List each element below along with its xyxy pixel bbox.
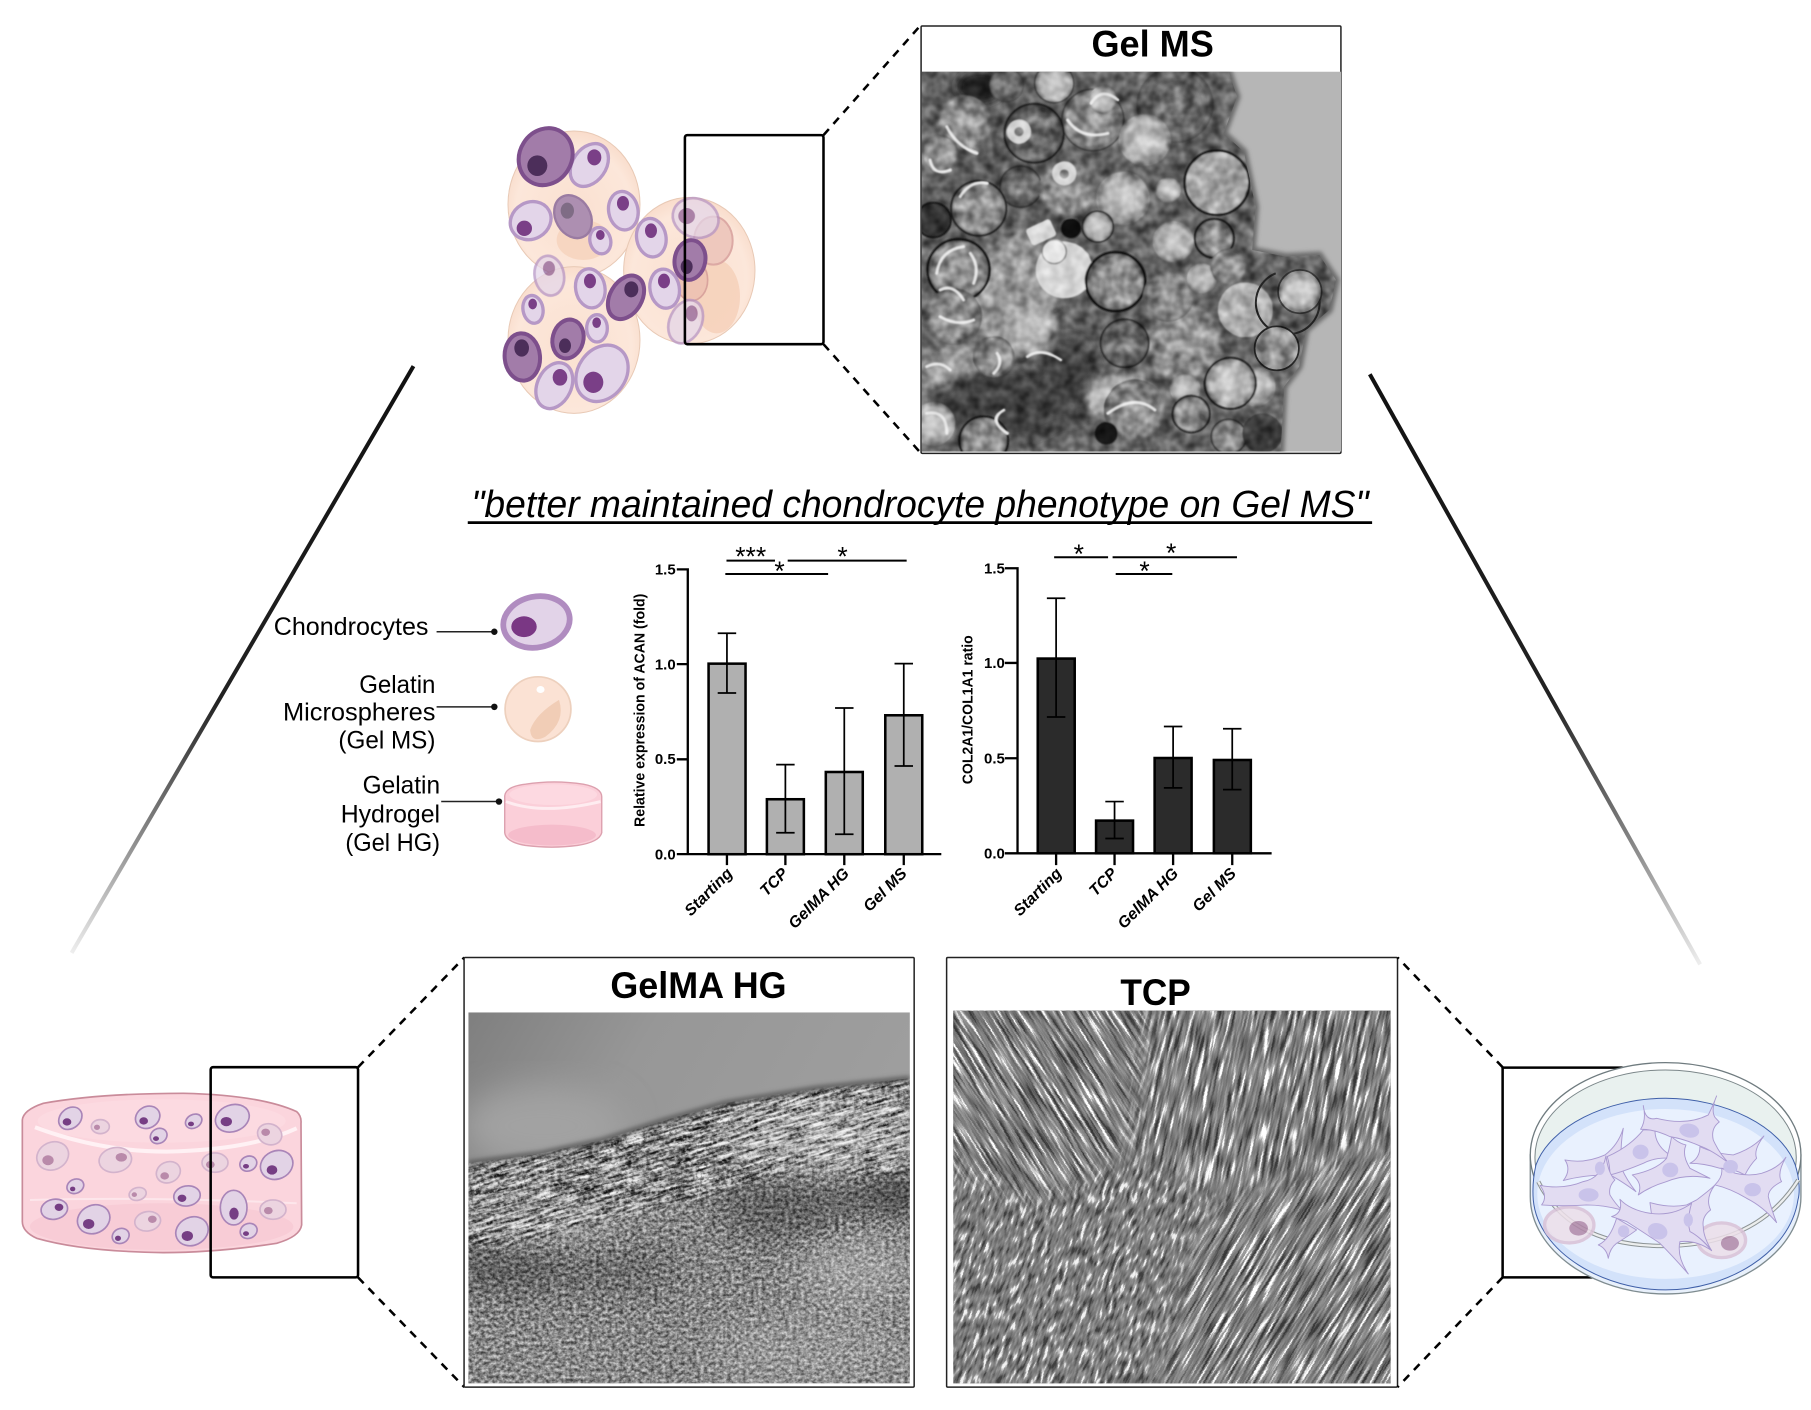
icon: chondrocytes on gelatin microspheres	[503, 118, 755, 415]
legend item: gelatin microspheres	[283, 671, 571, 754]
axes	[1005, 568, 1272, 865]
error bars	[1047, 598, 1241, 839]
x axis labels: Gel MS	[860, 865, 911, 915]
panel frame	[921, 26, 1341, 453]
dish lid	[1530, 1063, 1801, 1247]
legend item: chondrocytes	[274, 590, 575, 654]
legend item: gelatin hydrogel	[341, 771, 602, 857]
significance stars: *	[1166, 538, 1176, 568]
y axis tick labels	[655, 562, 676, 863]
icon: gelatin hydrogel disc with cells	[22, 1093, 302, 1253]
legend item: gelatin microspheres: Gelatin	[359, 671, 435, 699]
y axis tick labels: 0.0	[655, 846, 676, 863]
faded cells	[32, 1120, 286, 1233]
panel: GelMA HG micrograph	[463, 956, 915, 1388]
x axis labels	[682, 865, 911, 932]
y axis tick labels: 1.0	[984, 655, 1005, 672]
grey cell	[547, 188, 599, 245]
y axis tick labels: 1.5	[655, 562, 676, 579]
dark cells	[503, 118, 709, 382]
y axis title: Relative expression of ACAN (fold)	[632, 593, 648, 827]
error bars	[718, 633, 913, 834]
arrow: right diagonal connector	[1370, 374, 1700, 964]
rounded chondrocytes	[1545, 1207, 1746, 1258]
microsphere 2	[624, 197, 755, 344]
micrograph image	[468, 1012, 910, 1384]
axes	[677, 569, 941, 865]
icon: zoom rectangle on microspheres	[685, 135, 823, 344]
legend item: gelatin microspheres: Microspheres	[283, 699, 435, 727]
y axis tick labels: 0.0	[984, 846, 1005, 863]
significance stars: *	[1074, 539, 1084, 569]
x axis labels: GelMA HG	[786, 865, 853, 932]
icon: zoom rectangle on hydrogel	[211, 1067, 358, 1277]
icon: zoom rectangle on culture dish	[1503, 1068, 1623, 1277]
hydrogel body	[22, 1093, 302, 1253]
micrograph image	[953, 1011, 1391, 1383]
cell nuclei	[55, 1117, 277, 1241]
microsphere 3	[508, 267, 640, 413]
x axis labels: Starting	[682, 865, 736, 920]
heading: TCP: TCP	[1120, 972, 1191, 1013]
y axis tick labels	[984, 560, 1005, 863]
significance brackets	[1054, 557, 1237, 574]
arrow: dashed zoom lines to Gel MS	[823, 25, 921, 453]
x axis labels: Gel MS	[1190, 865, 1240, 915]
significance brackets	[725, 561, 907, 574]
title: "better maintained chondrocyte phenotype on Gel MS"	[471, 484, 1370, 526]
arrow: dashed zoom lines to TCP	[1398, 957, 1503, 1387]
x axis labels: TCP	[1086, 865, 1121, 900]
legend item: gelatin hydrogel: Gelatin	[363, 771, 440, 799]
dish front rim	[1538, 1180, 1798, 1246]
heading: Gel MS: Gel MS	[1091, 24, 1214, 65]
x axis labels: TCP	[757, 865, 792, 900]
significance stars: *	[774, 556, 785, 586]
bar chart: COL2A1/COL1A1 ratio	[960, 538, 1272, 932]
legend item: gelatin hydrogel: (Gel HG)	[345, 829, 440, 857]
significance stars	[735, 541, 848, 586]
legend	[274, 590, 602, 857]
panel: TCP micrograph	[947, 957, 1398, 1387]
y axis tick labels: 0.5	[984, 750, 1005, 767]
bars	[709, 664, 922, 854]
fibroblast nuclei	[1579, 1122, 1761, 1242]
significance stars: *	[837, 541, 848, 571]
dish outer wall	[1530, 1155, 1801, 1294]
y axis tick labels: 1.5	[984, 560, 1005, 577]
bars	[1038, 659, 1251, 853]
arrow: left diagonal connector	[72, 366, 413, 953]
heading: GelMA HG: GelMA HG	[610, 965, 787, 1006]
micrograph image	[911, 64, 1341, 465]
dark cell nuclei	[514, 155, 693, 357]
culture medium	[1533, 1098, 1799, 1290]
panel frame	[464, 957, 914, 1387]
significance stars: *	[1139, 556, 1150, 586]
significance stars: ***	[735, 541, 766, 571]
y axis tick labels: 0.5	[655, 751, 676, 768]
icon: culture dish with dedifferentiated cells	[1530, 1063, 1801, 1294]
legend item: chondrocytes: Chondrocytes	[274, 613, 428, 641]
bar chart: relative expression of ACAN	[632, 541, 941, 932]
y axis title: COL2A1/COL1A1 ratio	[960, 635, 976, 784]
faded cells	[531, 192, 724, 349]
light cell nuclei	[517, 149, 670, 393]
faded nuclei	[42, 1125, 273, 1223]
arrow: dashed zoom lines to GelMA HG	[358, 957, 464, 1387]
legend item: gelatin hydrogel: Hydrogel	[341, 800, 440, 828]
x axis labels: GelMA HG	[1115, 865, 1182, 932]
panel frame	[947, 957, 1398, 1387]
y axis tick labels: 1.0	[655, 656, 676, 673]
x axis labels	[1011, 865, 1240, 932]
significance stars	[1074, 538, 1176, 586]
panel: Gel MS micrograph	[911, 24, 1341, 465]
legend item: gelatin microspheres: (Gel MS)	[338, 726, 435, 754]
x axis labels: Starting	[1011, 865, 1066, 920]
microsphere 1	[508, 131, 640, 278]
embedded cells	[39, 1100, 298, 1251]
light cells	[503, 136, 683, 415]
fibroblast-like cells	[1540, 1096, 1786, 1274]
